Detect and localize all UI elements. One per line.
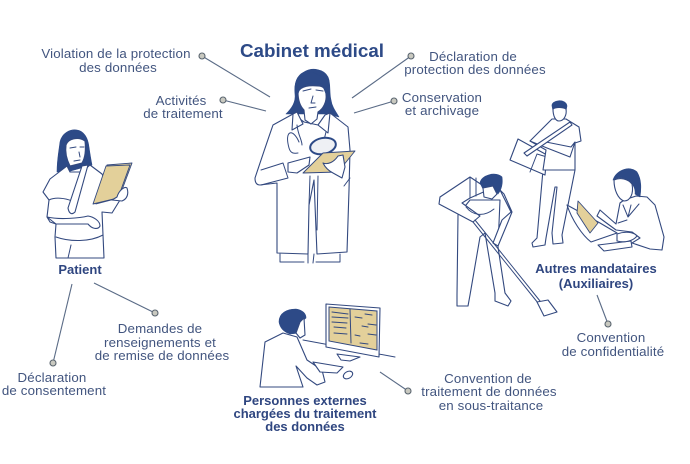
callout: conservation et archivage: Conservation <box>402 90 482 105</box>
callout: convention de confidentialité <box>562 295 664 359</box>
callout: convention de traitement: en sous-traitance <box>439 398 543 413</box>
callout: demandes de renseignements <box>94 283 229 363</box>
label: autres mandataires: Autres mandataires <box>535 261 657 276</box>
callout: convention de confidentialité: de confidentialité <box>562 344 664 359</box>
callout: conservation et archivage <box>354 90 482 118</box>
callout: déclaration de protection des données: protection des données <box>404 62 546 77</box>
callout: déclaration de protection des données: Déclaration de <box>429 49 517 64</box>
label: patient: Patient <box>58 262 102 277</box>
figure: worker with mop <box>439 174 557 316</box>
callout: déclaration de consentement: de consentement <box>2 383 106 398</box>
label: autres mandataires: (Auxiliaires) <box>559 276 633 291</box>
callout: activités de traitement <box>143 93 266 121</box>
callout: demandes de renseignements: Demandes de <box>118 321 202 336</box>
callout: activités de traitement: de traitement <box>143 106 223 121</box>
callout: convention de traitement <box>380 371 557 413</box>
callout: violation de la protection des données <box>41 46 270 97</box>
figure: patient with sling and document <box>43 130 132 258</box>
figure: courier with box <box>510 101 581 247</box>
callout: conservation et archivage: et archivage <box>405 103 479 118</box>
figure: doctor with clipboard and magnifier <box>255 69 355 263</box>
label: personnes externes: des données <box>265 419 345 434</box>
callout: convention de confidentialité: Convention <box>577 330 645 345</box>
callout: demandes de renseignements: renseignements et <box>104 335 216 350</box>
callout: convention de traitement: traitement de données <box>421 384 557 399</box>
callout: déclaration de consentement <box>2 284 106 398</box>
callout: déclaration de protection des données <box>352 49 546 98</box>
callout: violation de la protection des données: des données <box>79 60 157 75</box>
label: personnes externes: chargées du traitement <box>233 406 377 421</box>
callout: violation de la protection des données: Violation de la protection <box>41 46 191 61</box>
label: personnes externes <box>233 393 377 434</box>
figure: woman with papers <box>567 169 664 251</box>
callout: convention de traitement: Convention de <box>444 371 532 386</box>
label: autres mandataires <box>535 261 657 291</box>
label: personnes externes: Personnes externes <box>243 393 367 408</box>
callout: demandes de renseignements: de remise de données <box>95 348 229 363</box>
figure: person at computer <box>260 304 395 387</box>
callout: activités de traitement: Activités <box>156 93 207 108</box>
callout: déclaration de consentement: Déclaration <box>18 370 86 385</box>
title: Cabinet médical <box>240 40 384 61</box>
